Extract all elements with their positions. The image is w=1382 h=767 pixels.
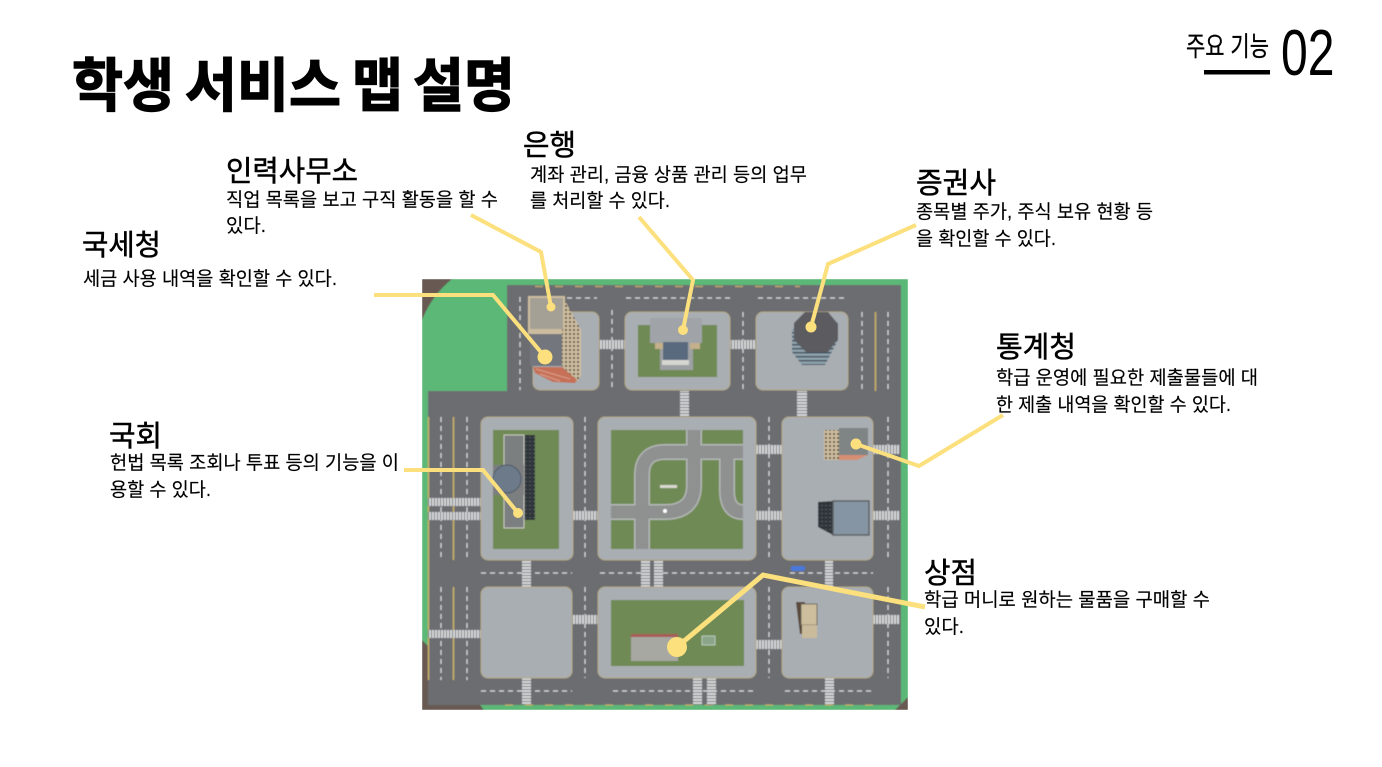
label: 은행: 은행 (523, 129, 576, 162)
label: 은행: 를 처리할 수 있다. (530, 190, 670, 212)
label: 은행 (523, 129, 807, 212)
label: 증권사: 을 확인할 수 있다. (916, 228, 1056, 250)
building: 상점 roof (631, 634, 715, 661)
building: 통계청 (824, 428, 868, 460)
title: 서비스 (185, 54, 341, 119)
label: 은행: 계좌 관리, 금융 상품 관리 등의 업무 (530, 164, 807, 186)
label: 통계청: 통계청 (996, 332, 1076, 364)
building: 증권사 (792, 312, 838, 365)
label: 국회: 헌법 목록 조회나 투표 등의 기능을 이 (110, 452, 399, 474)
building: small shop (796, 602, 817, 638)
label: 인력사무소: 직업 목록을 보고 구직 활동을 할 수 (226, 189, 498, 211)
label: 인력사무소 (226, 156, 498, 237)
lawns and paved paths (493, 325, 744, 666)
label: 국세청: 세금 사용 내역을 확인할 수 있다. (83, 268, 337, 290)
label: 증권사: 종목별 주가, 주식 보유 현황 등 (916, 201, 1153, 223)
callout leader: 국회 (404, 470, 523, 518)
callout leader: 인력사무소 (471, 215, 556, 312)
dirt corners (422, 279, 908, 710)
title: 설명 (413, 54, 515, 119)
city blocks (481, 312, 873, 678)
building: 은행 (650, 318, 702, 370)
label: 국세청 (82, 230, 337, 290)
label: 인력사무소: 인력사무소 (226, 156, 358, 188)
label: 증권사: 증권사 (916, 168, 996, 200)
building: 국회 (493, 435, 535, 528)
title: 맵 (352, 54, 403, 119)
parked car (791, 566, 805, 571)
label underline (1204, 70, 1270, 74)
section tag: 주요 기능 02 (1186, 17, 1334, 90)
callout leader: 국세청 (374, 295, 552, 364)
section label: 주요 기능 (1186, 32, 1269, 62)
city map (422, 279, 908, 710)
crosswalks (428, 340, 900, 705)
label: 인력사무소: 있다. (226, 215, 266, 237)
label: 상점: 상점 (924, 558, 977, 590)
label: 국세청: 국세청 (82, 230, 161, 262)
label: 상점: 있다. (924, 616, 964, 638)
label: 국회 (109, 420, 399, 501)
building: 인력사무소 (528, 296, 581, 383)
label: 통계청: 학급 운영에 필요한 제출물들에 대 (996, 367, 1258, 389)
label: 국회: 국회 (109, 420, 162, 453)
grass ground (422, 279, 908, 710)
callout leader: 통계청 (850, 415, 1003, 466)
label: 상점 (924, 558, 1210, 638)
label: 증권사 (916, 168, 1153, 250)
label: 통계청 (996, 332, 1258, 416)
section number: 02 (1281, 17, 1334, 90)
callout leader: 증권사 (806, 225, 916, 332)
road network (428, 285, 901, 705)
title: 학생 (72, 54, 174, 119)
lane markings (428, 286, 888, 705)
callout leader: 은행 (639, 217, 693, 335)
callout leader: 상점 (667, 575, 925, 657)
building: dark office (818, 501, 869, 535)
label: 국회: 용할 수 있다. (110, 479, 211, 501)
central plaza props (660, 485, 677, 513)
label: 통계청: 한 제출 내역을 확인할 수 있다. (996, 394, 1231, 416)
label: 상점: 학급 머니로 원하는 물품을 구매할 수 (924, 589, 1210, 611)
